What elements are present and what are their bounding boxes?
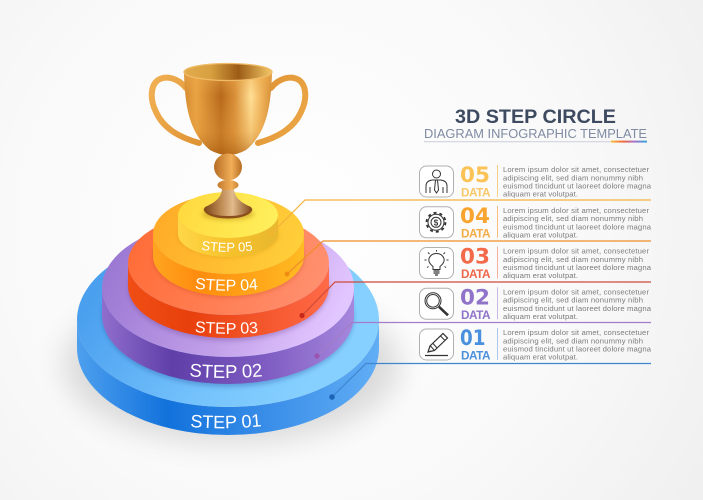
- description: adipiscing elit, sed diam nonummy nibh: [503, 173, 643, 182]
- ground shadow: [64, 287, 400, 443]
- description: [503, 165, 652, 199]
- description: [503, 287, 652, 321]
- title line 1: 3D STEP CIRCLE: [455, 106, 616, 128]
- description: euismod tincidunt ut laoreet dolore magna: [503, 263, 652, 272]
- knob: [214, 154, 242, 180]
- collar: [218, 180, 238, 190]
- foot base: [204, 208, 252, 218]
- description: adipiscing elit, sed diam nonummy nibh: [503, 255, 643, 264]
- description: Lorem ipsum dolor sit amet, consectetuer: [503, 246, 649, 256]
- description: euismod tincidunt ut laoreet dolore magna: [503, 344, 652, 354]
- divider: [497, 206, 498, 238]
- description: euismod tincidunt ut laoreet dolore magna: [503, 304, 652, 313]
- disc: step 04: [153, 198, 304, 296]
- cup body: [184, 72, 272, 155]
- description: aliquam erat volutpat.: [503, 190, 578, 199]
- description: adipiscing elit, sed diam nonummy nibh: [503, 296, 643, 305]
- description: [503, 328, 652, 362]
- number 02: 02: [460, 285, 490, 310]
- disc: step 01: STEP 01: [191, 414, 261, 428]
- title colour accent: [611, 141, 647, 143]
- label: DATA: [461, 267, 491, 281]
- icon: businessman: [420, 166, 454, 197]
- right handle: [258, 78, 305, 143]
- icon: gear with dollar: $: [434, 218, 439, 227]
- disc: step 02: STEP 02: [190, 364, 262, 378]
- disc: step 05: [178, 192, 278, 257]
- label: DATA: [461, 308, 491, 322]
- disc: step 03: STEP 03: [196, 321, 258, 334]
- title: [424, 106, 647, 143]
- divider: [497, 328, 498, 360]
- description: Lorem ipsum dolor sit amet, consectetuer: [503, 165, 649, 174]
- number 01: 01: [460, 326, 486, 351]
- cup rim: [184, 64, 272, 80]
- pyramid of discs: [77, 192, 379, 435]
- description: [503, 206, 652, 240]
- leader line: step 01: [329, 364, 651, 400]
- label: DATA: [461, 348, 491, 362]
- number 03: 03: [460, 244, 490, 270]
- trophy foot shadow: [202, 208, 254, 220]
- left handle: [152, 78, 199, 143]
- description: adipiscing elit, sed diam nonummy nibh: [503, 214, 643, 223]
- divider: [497, 165, 498, 197]
- icon: magnifier: [420, 288, 454, 319]
- label: DATA: [461, 186, 491, 200]
- icon: pencil: [420, 329, 454, 360]
- description: adipiscing elit, sed diam nonummy nibh: [503, 336, 643, 345]
- disc: step 01: [77, 267, 379, 435]
- row 04: [420, 204, 652, 240]
- leader line: step 04: [285, 241, 651, 276]
- title underline: [424, 141, 647, 142]
- description: aliquam erat volutpat.: [503, 353, 578, 362]
- row 03: [420, 244, 652, 281]
- title line 2: DIAGRAM INFOGRAPHIC TEMPLATE: [424, 126, 647, 141]
- number 05: 05: [460, 163, 490, 188]
- disc: step 05: STEP 05: [202, 241, 252, 252]
- description: aliquam erat volutpat.: [503, 271, 578, 280]
- description: Lorem ipsum dolor sit amet, consectetuer: [503, 287, 649, 296]
- divider: [497, 287, 498, 319]
- divider: [497, 246, 498, 278]
- leader line: step 05: [270, 200, 651, 235]
- icon: light bulb: [420, 248, 454, 278]
- disc: step 03: [128, 228, 329, 338]
- leader line: step 03: [299, 282, 651, 318]
- cup shading: [184, 72, 272, 155]
- row 05: [420, 163, 652, 200]
- trophy: [152, 64, 305, 220]
- leader line: step 02: [314, 322, 651, 359]
- label: DATA: [461, 226, 491, 240]
- foot: [204, 188, 252, 218]
- description: euismod tincidunt ut laoreet dolore magna: [503, 222, 652, 231]
- number 04: 04: [460, 204, 490, 229]
- description: [503, 246, 652, 280]
- description: Lorem ipsum dolor sit amet, consectetuer: [503, 328, 649, 337]
- disc: step 04: STEP 04: [196, 278, 258, 291]
- description: Lorem ipsum dolor sit amet, consectetuer: [503, 206, 649, 215]
- row 02: [420, 285, 652, 322]
- icon: gear with dollar: [420, 207, 454, 238]
- description: euismod tincidunt ut laoreet dolore magna: [503, 182, 652, 190]
- disc: step 02: [102, 238, 354, 384]
- description: aliquam erat volutpat.: [503, 230, 578, 239]
- description: aliquam erat volutpat.: [503, 312, 578, 321]
- row 01: [420, 326, 652, 362]
